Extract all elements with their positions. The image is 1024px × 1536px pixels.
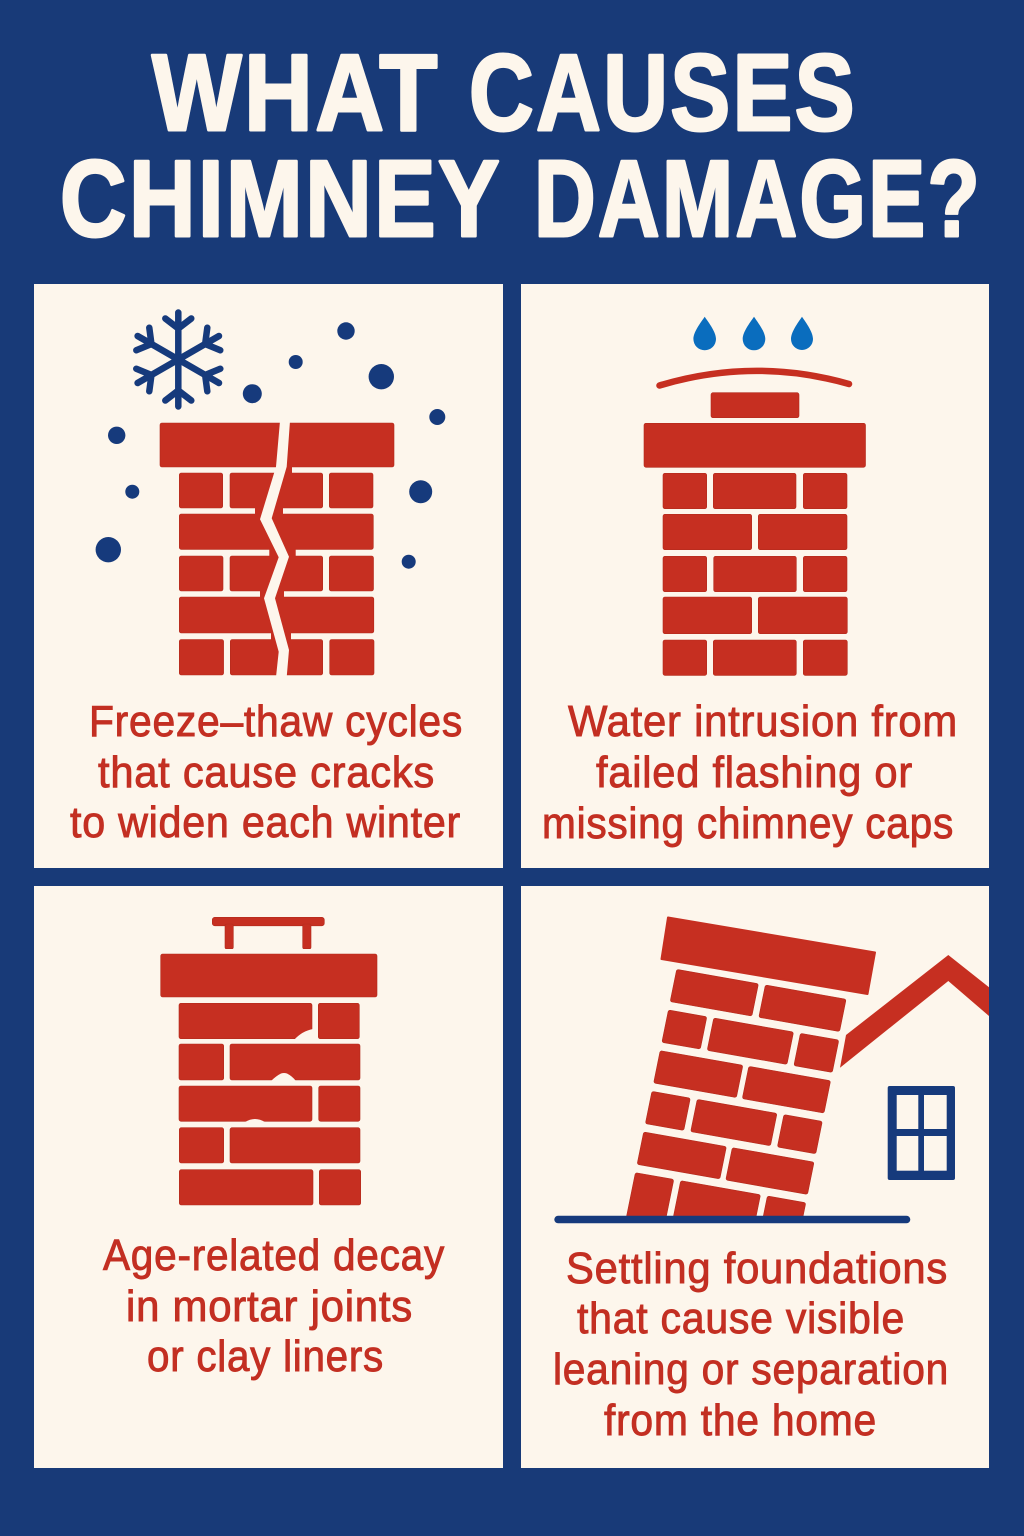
icon: zigzag crack (260, 421, 290, 677)
icon: failed flashing arc (660, 371, 849, 386)
icon: snowflake (131, 312, 226, 406)
panel: age-related decay (34, 886, 503, 1468)
text: settling foundations caption: from the home (604, 1396, 877, 1445)
icon: cracked brick chimney (160, 423, 394, 675)
icon: window (888, 1086, 955, 1180)
title: WHAT (152, 32, 440, 154)
icon: mortar chips (245, 1029, 313, 1122)
text: settling foundations caption: leaning or separation (553, 1345, 949, 1394)
icon: leaning chimney (626, 916, 876, 1216)
icon: snow dots (96, 322, 445, 569)
panel: water intrusion (521, 284, 989, 868)
icon: ground line (554, 1216, 910, 1223)
text: freeze-thaw caption: that cause cracks (98, 748, 435, 797)
title (60, 32, 982, 260)
text: age-related decay caption: in mortar joints (126, 1282, 413, 1331)
icon: brick chimney (644, 393, 866, 675)
panel: settling foundations (521, 886, 989, 1468)
text: freeze-thaw caption: Freeze–thaw cycles (89, 697, 463, 746)
text: water intrusion caption: failed flashing or (596, 748, 913, 797)
icon: decayed brick chimney (161, 917, 377, 1205)
text: freeze-thaw caption (70, 697, 463, 847)
text: age-related decay caption (103, 1231, 445, 1381)
title: CAUSES (469, 32, 857, 154)
text: settling foundations caption (553, 1244, 949, 1445)
icon: water drops (693, 317, 813, 350)
icon: roof (840, 955, 989, 1068)
text: settling foundations caption: Settling foundations (566, 1244, 948, 1293)
text: age-related decay caption: or clay liners (147, 1332, 384, 1381)
text: water intrusion caption: Water intrusion from (568, 697, 958, 746)
text: settling foundations caption: that cause visible (577, 1294, 905, 1343)
text: age-related decay caption: Age-related decay (103, 1231, 445, 1280)
text: freeze-thaw caption: to widen each winter (70, 798, 461, 847)
text: water intrusion caption (542, 697, 958, 848)
text: water intrusion caption: missing chimney caps (542, 799, 954, 848)
panel: freeze-thaw cycles (34, 284, 503, 868)
title: CHIMNEY (60, 138, 502, 260)
